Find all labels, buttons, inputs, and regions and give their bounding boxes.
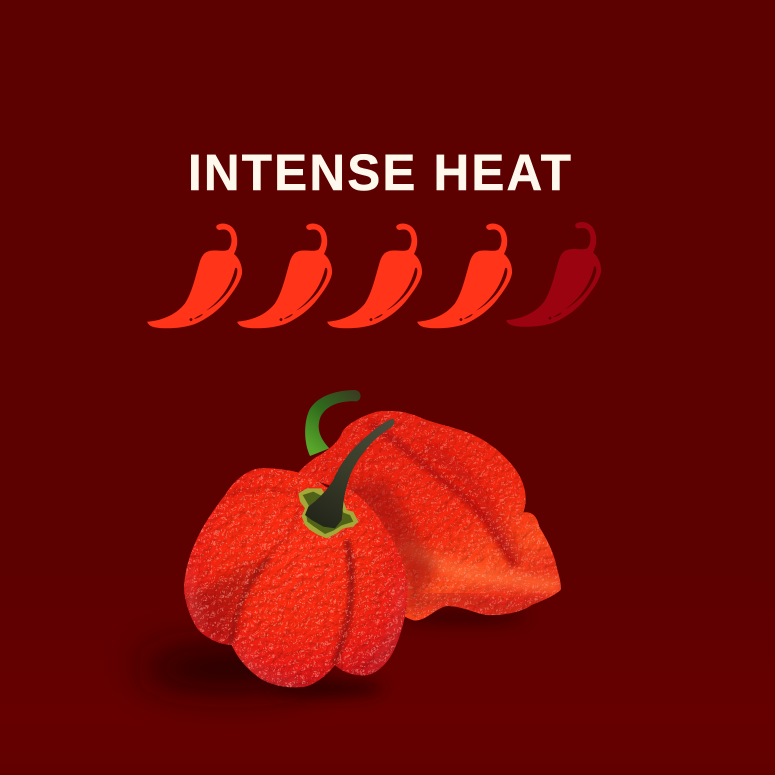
green stem of back pepper	[305, 390, 361, 456]
icon: chili 4 filled	[417, 223, 512, 328]
icon: chili 2 filled	[237, 223, 332, 328]
icon: chili 5 dimmed	[506, 222, 601, 327]
dark stem of front pepper	[305, 419, 395, 528]
title: INTENSE HEAT	[188, 144, 571, 201]
back pepper	[298, 410, 561, 621]
ground shadow	[140, 611, 527, 696]
icon: chili 1 filled	[147, 223, 242, 328]
calyx	[298, 488, 358, 538]
front pepper	[180, 463, 413, 693]
shadow cast on back pepper by front pepper	[346, 476, 441, 612]
icon: chili 3 filled	[327, 223, 422, 328]
heat rating: chili icons	[147, 222, 601, 328]
photo: two red peppers	[140, 390, 570, 696]
